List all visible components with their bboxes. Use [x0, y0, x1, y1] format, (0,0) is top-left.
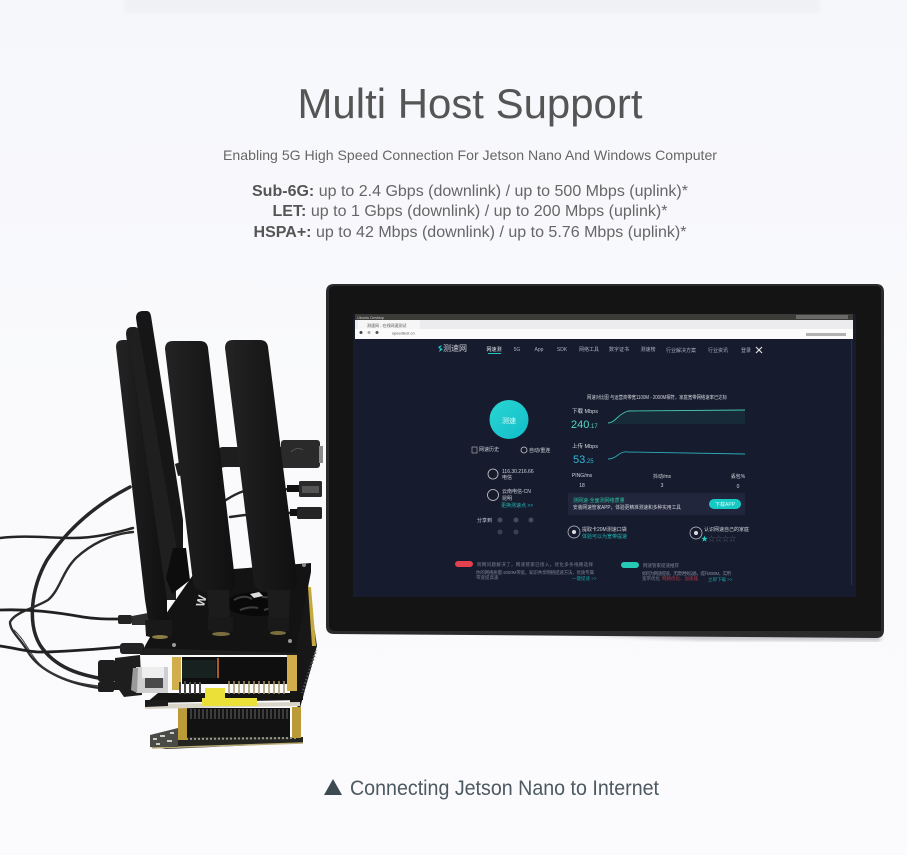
- ping stats: 丢包%: [731, 473, 746, 480]
- left column info: 自动/重连: [529, 447, 550, 454]
- antenna: rear: [136, 311, 183, 560]
- lower standoffs: [178, 707, 301, 740]
- browser toolbar: [355, 320, 853, 339]
- site navigation: 网速测: [486, 346, 502, 353]
- top plate: [140, 563, 311, 655]
- antenna: front left: [116, 340, 172, 639]
- spec: HSPA+: HSPA+: up to 42 Mbps (downlink) / up to 5.76 Mbps (uplink)*: [254, 224, 686, 241]
- lower promo items: 提取卡20M测速口袋: [582, 526, 627, 533]
- bottom news: 网络优化、加速器: [662, 575, 698, 582]
- left column info: 网速历史: [479, 446, 499, 453]
- right board side: [290, 585, 317, 708]
- fan grille: [226, 592, 288, 616]
- spec: Sub-6G: Sub-6G: up to 2.4 Gbps (downlink) / up to 500 Mbps (uplink)*: [252, 183, 688, 200]
- top note: 网速对比图 与运营商带宽1100M - 2000M相符，家庭宽带网络速率已达标: [587, 394, 727, 401]
- site navigation: 测速榜: [640, 346, 656, 353]
- ping stats: [572, 473, 746, 490]
- app promotion banner: 测网速·全面测网络质量: [573, 497, 625, 504]
- subtitle: Enabling 5G High Speed Connection For Jetson Nano And Windows Computer: [223, 147, 717, 163]
- start button: [490, 400, 528, 439]
- bottom news: 立即下载 >>: [708, 576, 733, 583]
- lower promo items: ★☆☆☆☆: [701, 534, 736, 543]
- site navigation: 5G: [514, 347, 520, 353]
- USB connector: [287, 481, 322, 497]
- speed specifications: [252, 183, 688, 241]
- left column info: 云南电信-CN: [502, 488, 531, 495]
- ping stats: 0: [737, 484, 740, 490]
- download speed chart: 下载 Mbps: [572, 407, 598, 415]
- left column info: 昆明: [502, 496, 512, 502]
- ping stats: 抖动/ms: [653, 473, 672, 480]
- black connector block: [187, 708, 290, 737]
- caption triangle: [324, 779, 342, 795]
- left column info: 更换测速点 >>: [501, 502, 533, 509]
- monitor: [326, 284, 884, 641]
- cables: [0, 487, 296, 688]
- browser toolbar: speedtest.cn: [392, 330, 415, 336]
- header pins: [229, 681, 284, 694]
- ping stats: PING/ms: [572, 473, 593, 479]
- app promotion banner: 安装网速管家APP，体验更精准测速和多种实用工具: [573, 504, 681, 511]
- bottom board: [150, 728, 303, 749]
- site navigation: 登录: [741, 347, 751, 354]
- antenna: center: [165, 341, 235, 636]
- left column info: [472, 446, 550, 534]
- desktop title bar: [355, 314, 853, 320]
- start button: 测速: [502, 417, 516, 425]
- bottom news: 你的网络质量-2000M带宽，知识共享网络提速方法，优质专属: [476, 569, 594, 576]
- site navigation: 行业资讯: [708, 347, 728, 354]
- flat ribbon cable: [32, 487, 130, 679]
- HDMI band cable: [175, 447, 285, 476]
- bottom news: 如何为网速提速，无需更换设备，提升2000M，实用: [642, 570, 731, 577]
- site navigation: 网络工具: [579, 346, 599, 353]
- plug: micro cable: [98, 682, 126, 692]
- lower promo items: [568, 526, 749, 543]
- ping stats: 3: [661, 483, 664, 489]
- spec: LET: LET: up to 1 Gbps (downlink) / up to 200 Mbps (uplink)*: [272, 203, 668, 220]
- site navigation: 测速网: [443, 344, 467, 353]
- blurred top strip: [125, 0, 820, 13]
- bottom news: 宽带优化: [642, 575, 660, 582]
- bottom news: 跨网问题解决了，网速管家已接入，优化多条线路选择: [477, 561, 594, 568]
- yellow header: [202, 688, 257, 706]
- bottom news: 一键提速 >>: [572, 575, 597, 582]
- heatsink area: [182, 657, 288, 684]
- bottom news: 网速管家提速推荐: [643, 562, 679, 569]
- top plate: W: [193, 593, 210, 608]
- left column info: 分享到: [477, 517, 492, 524]
- site navigation: 数字证书: [609, 346, 629, 353]
- desktop title bar: Ubuntu Desktop: [357, 316, 384, 320]
- bottom news: [455, 561, 733, 583]
- middle board edge: [145, 702, 300, 709]
- lower promo items: 体验可以为宽带提速: [582, 533, 627, 540]
- bottom news: 带宽提高速: [476, 574, 499, 581]
- middle board: [146, 693, 303, 703]
- antenna: middle rear: [126, 327, 176, 600]
- download speed chart: 240.17: [571, 419, 598, 431]
- upper standoffs: [172, 655, 297, 691]
- plug: upper left cable: [118, 613, 148, 625]
- upload speed chart: 上传 Mbps: [572, 442, 598, 450]
- antennas: [116, 311, 297, 639]
- plug: lower left cable: [120, 643, 144, 654]
- site navigation: [438, 344, 762, 354]
- app promotion banner: 下载APP: [715, 501, 736, 508]
- site navigation: SDK: [557, 347, 568, 353]
- dev board stack: [131, 563, 317, 749]
- app promotion banner: [568, 493, 745, 515]
- left column info: 116.30.216.66: [502, 469, 534, 475]
- browser toolbar: 测速网 - 在线网速测试: [367, 322, 407, 328]
- site navigation: App: [535, 347, 544, 353]
- micro USB connector: [290, 507, 322, 519]
- lower promo items: 认识网速自己的家庭: [704, 526, 749, 533]
- USB port: [131, 667, 168, 693]
- screen: speed test web page: [353, 314, 856, 597]
- ping stats: 18: [579, 483, 585, 489]
- antenna: right: [225, 340, 297, 635]
- right yellow edge: [308, 587, 316, 646]
- title: Multi Host Support: [298, 80, 643, 127]
- site navigation: 行业解决方案: [666, 347, 696, 354]
- HDMI connector: [281, 440, 323, 468]
- antenna hinge: [166, 548, 190, 594]
- upload speed chart: [572, 442, 745, 466]
- left column info: 电信: [502, 474, 512, 481]
- plug: USB cable: [98, 655, 142, 697]
- download speed chart: [571, 407, 745, 431]
- upload speed chart: 53.25: [573, 454, 594, 466]
- caption: Connecting Jetson Nano to Internet: [350, 777, 659, 800]
